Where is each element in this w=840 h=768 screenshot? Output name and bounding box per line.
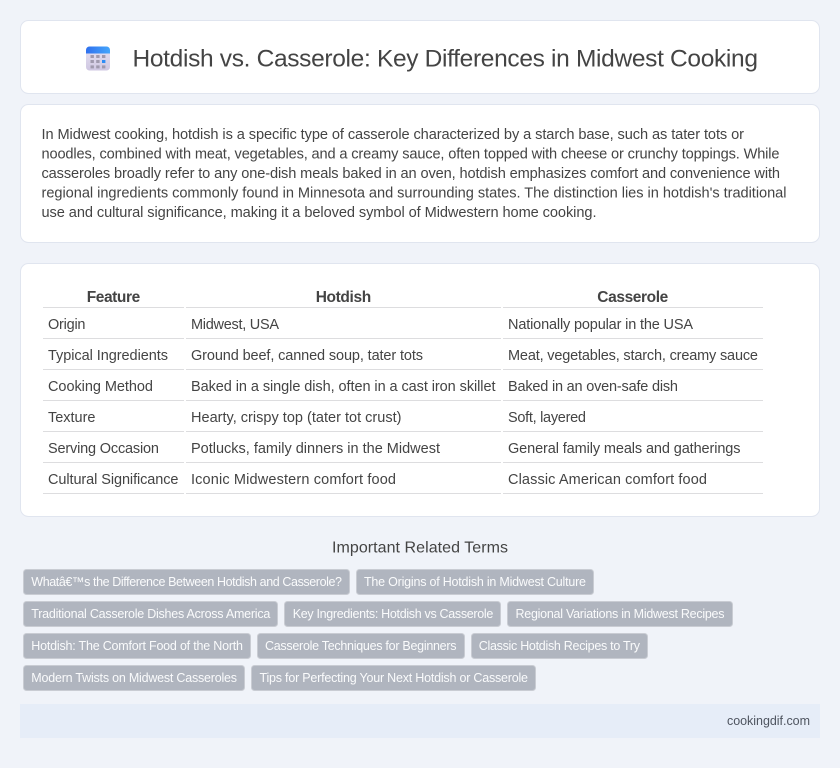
chip: modern twists (24, 666, 244, 690)
intro paragraph: regional ingredients commonly found in Minnesota and surrounding states. The distinction lies in hotdish's traditional (42, 186, 786, 202)
row: typical ingredients: Meat, vegetables, starch, creamy sauce (508, 348, 758, 364)
chip: regional variations: Regional Variations in Midwest Recipes (516, 607, 724, 621)
row: origin (48, 317, 693, 333)
intro paragraph: In Midwest cooking, hotdish is a specific type of casserole characterized by a starch base, such as tater tots or (42, 127, 744, 143)
table header row (87, 289, 669, 306)
footer source text: cookingdif.com (727, 714, 810, 728)
related terms section (24, 540, 732, 690)
chip: techniques: Casserole Techniques for Beginners (265, 639, 456, 653)
table header row: Feature (87, 289, 141, 306)
chip: tips: Tips for Perfecting Your Next Hotdish or Casserole (260, 671, 528, 685)
row: serving occasion: General family meals and gatherings (508, 441, 740, 457)
chip: origins: The Origins of Hotdish in Midwest Culture (364, 575, 586, 589)
intro paragraph: noodles, combined with meat, vegetables, and a creamy sauce, often topped with cheese or crunchy toppings. While (42, 146, 780, 162)
header panel (20, 20, 820, 94)
chip: difference: Whatâ€™s the Difference Between Hotdish and Casserole? (31, 575, 342, 589)
chip: origins (356, 570, 594, 594)
row: typical ingredients (48, 348, 758, 364)
title: Hotdish vs. Casserole: Key Differences in Midwest Cooking (132, 46, 758, 72)
row: cooking method: Baked in an oven-safe dish (508, 379, 678, 395)
row: origin: Origin (48, 317, 86, 333)
row: texture: Hearty, crispy top (tater tot crust) (191, 410, 402, 426)
row: cultural significance: Classic American comfort food (508, 472, 707, 488)
row: texture: Texture (48, 410, 96, 426)
intro paragraph (42, 127, 786, 221)
chip: key ingredients (284, 602, 500, 626)
chip: classic recipes: Classic Hotdish Recipes to Try (479, 639, 641, 653)
row: cooking method: Baked in a single dish, often in a cast iron skillet (191, 379, 496, 395)
row: texture: Soft, layered (508, 410, 586, 426)
chip: techniques (258, 634, 464, 658)
chip: comfort food: Hotdish: The Comfort Food of the North (31, 639, 243, 653)
related terms heading: Important Related Terms (332, 540, 508, 556)
row: serving occasion (48, 441, 740, 457)
row: cooking method: Cooking Method (48, 379, 153, 395)
row: origin: Midwest, USA (191, 317, 279, 333)
row: cooking method (48, 379, 678, 395)
panel: introduction (20, 104, 820, 242)
row: serving occasion: Serving Occasion (48, 441, 159, 457)
chip: tips (252, 666, 536, 690)
icon: calendar (86, 46, 110, 70)
row: cultural significance (48, 472, 707, 488)
row: origin: Nationally popular in the USA (508, 317, 693, 333)
chip: key ingredients: Key Ingredients: Hotdish vs Casserole (293, 607, 493, 621)
footer (20, 704, 820, 738)
row: texture (48, 410, 586, 426)
table header row: Casserole (597, 289, 669, 306)
chip: regional variations (508, 602, 732, 626)
chip: classic recipes (472, 634, 648, 658)
panel: comparison table (20, 264, 820, 516)
intro paragraph: casseroles broadly refer to any one-dish meals baked in an oven, hotdish emphasizes comfort and convenience with (42, 166, 780, 182)
row: cultural significance: Cultural Significance (48, 472, 178, 488)
row: serving occasion: Potlucks, family dinners in the Midwest (191, 441, 440, 457)
table header row: Hotdish (316, 289, 371, 306)
row: typical ingredients: Ground beef, canned soup, tater tots (191, 348, 423, 364)
chip: difference (24, 570, 350, 594)
chip: modern twists: Modern Twists on Midwest Casseroles (31, 671, 237, 685)
row: cultural significance: Iconic Midwestern comfort food (191, 472, 396, 488)
chip: traditional dishes: Traditional Casserole Dishes Across America (31, 607, 270, 621)
chip: traditional dishes (24, 602, 278, 626)
row: typical ingredients: Typical Ingredients (48, 348, 168, 364)
chip: comfort food (24, 634, 250, 658)
intro paragraph: use and cultural significance, making it a beloved symbol of Midwestern home cooking. (42, 205, 596, 221)
